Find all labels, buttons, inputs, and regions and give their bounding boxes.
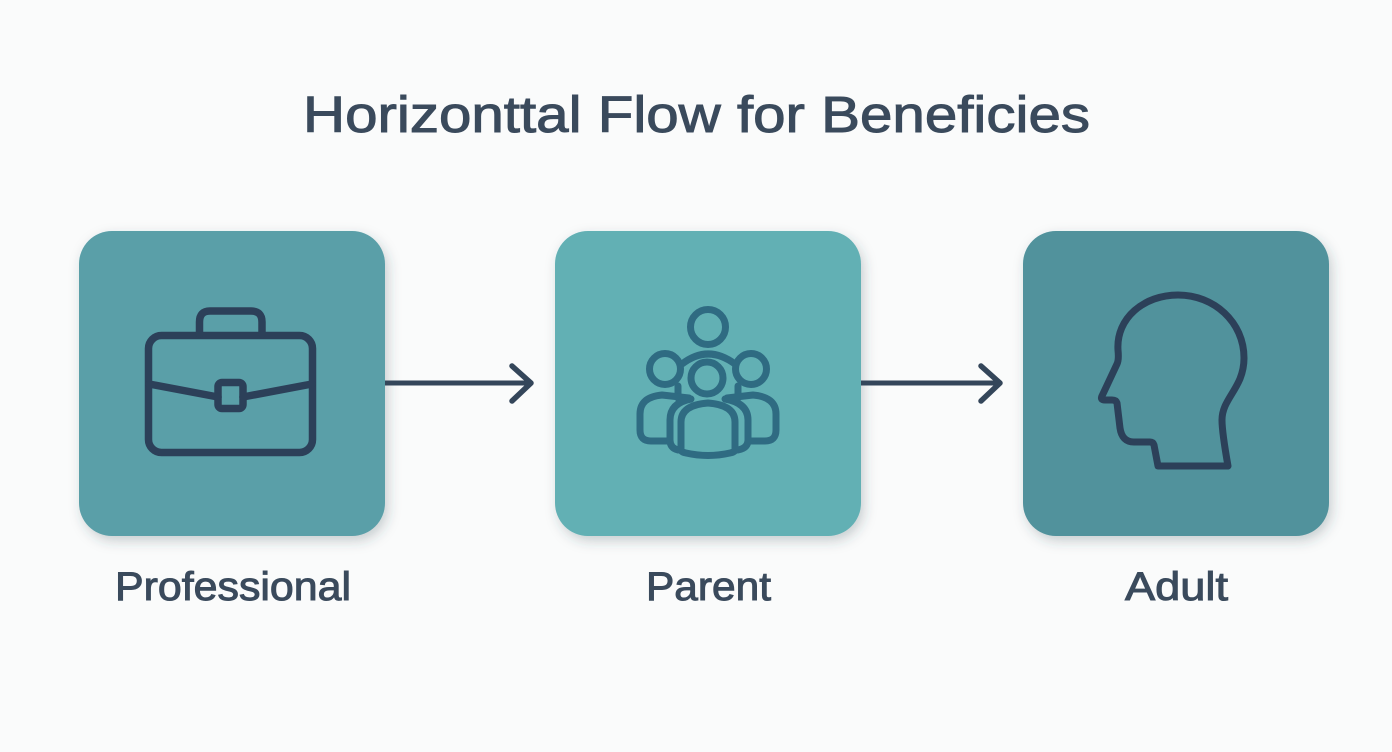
icon: group of people <box>640 310 776 456</box>
arrow: parent to adult <box>861 366 1000 401</box>
panel: parent card <box>555 231 861 536</box>
label: Parent: Parent <box>646 565 771 609</box>
panel: professional card <box>79 231 385 536</box>
icon: briefcase <box>148 311 312 452</box>
arrow: professional to parent <box>385 366 531 401</box>
panel: adult card <box>1023 231 1329 536</box>
label: Adult: Adult <box>1125 565 1228 609</box>
title: Horizonttal Flow for Beneficies <box>303 86 1090 143</box>
label: Professional: Professional <box>115 565 351 609</box>
icon: head profile <box>1101 295 1244 466</box>
